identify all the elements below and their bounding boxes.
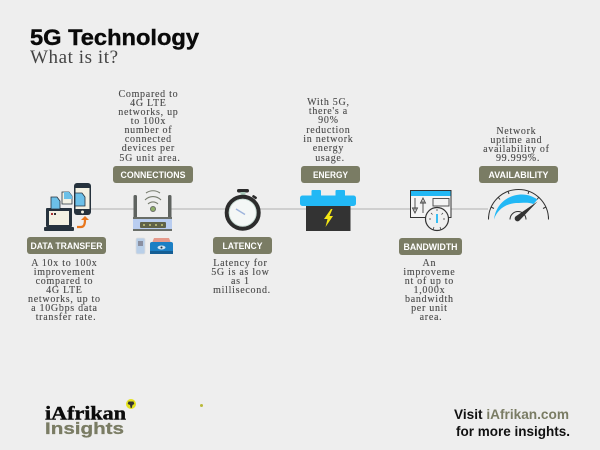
logo: iAfrikan Insights: iAfrikan	[45, 404, 126, 424]
title: 5G Technology	[30, 25, 200, 50]
panel: availability	[479, 126, 558, 221]
label pill: connections: CONNECTIONS	[120, 170, 186, 180]
text: energy: With 5G,	[307, 97, 350, 108]
text: energy: 90%	[318, 115, 339, 126]
icon: stopwatch	[227, 189, 259, 229]
text: data transfer: compared to	[36, 276, 93, 287]
text: availability: availability of	[483, 144, 550, 155]
label pill: bandwidth: BANDWIDTH	[404, 242, 458, 252]
label pill: connections	[113, 166, 193, 183]
label pill: data transfer: DATA TRANSFER	[30, 241, 103, 251]
text: data transfer: networks, up to	[28, 294, 101, 305]
panel: latency	[211, 189, 273, 296]
text: data transfer: transfer rate.	[36, 312, 96, 323]
panel: connections	[113, 89, 193, 254]
text: connections: 5G unit area.	[119, 153, 181, 164]
text: bandwidth: bandwidth	[405, 294, 454, 305]
subtitle: What is it?	[30, 47, 118, 68]
call to action: Visit iAfrikan.com	[454, 406, 569, 422]
panel: bandwidth	[399, 190, 462, 323]
text: energy: usage.	[315, 153, 345, 164]
text: connections: devices per	[122, 143, 175, 154]
text: energy: in network	[303, 134, 354, 145]
text: bandwidth: An	[423, 258, 436, 269]
icon: data transfer devices	[44, 183, 91, 231]
icon: wifi router	[133, 190, 172, 231]
logo: iAfrikan Insights	[45, 399, 136, 438]
label pill: latency: LATENCY	[222, 241, 262, 251]
text: connections: to 100x	[131, 116, 166, 127]
text: latency: millisecond.	[213, 285, 271, 296]
call to action	[454, 406, 570, 439]
icon: phone and car	[136, 238, 173, 254]
text: connections: networks, up	[118, 107, 179, 118]
decorative dot	[200, 404, 203, 407]
icon: africa badge	[126, 399, 136, 409]
icon: speedometer gauge	[488, 190, 548, 221]
call to action: for more insights.	[456, 423, 570, 439]
text: data transfer: A 10x to 100x	[31, 258, 98, 269]
icon: battery	[300, 190, 356, 231]
text: connections: Compared to	[118, 89, 178, 100]
label pill: energy: ENERGY	[313, 170, 348, 180]
text: energy: energy	[313, 143, 344, 154]
text: bandwidth: improveme	[403, 267, 455, 278]
text: latency: Latency for	[213, 258, 268, 269]
logo: iAfrikan Insights: Insights	[45, 419, 124, 438]
text: bandwidth: per unit	[411, 303, 448, 314]
text: connections: 4G LTE	[130, 98, 167, 109]
text: availability: 99.999%.	[496, 153, 540, 164]
panel: energy	[300, 97, 360, 231]
text: energy: there's a	[309, 106, 348, 117]
text: bandwidth: area.	[420, 312, 442, 323]
text: latency: 5G is as low	[211, 267, 270, 278]
text: bandwidth: 1,000x	[413, 285, 445, 296]
text: bandwidth: nt of up to	[405, 276, 454, 287]
text: data transfer: a 10Gbps data	[31, 303, 98, 314]
icon: bandwidth window and gauge	[410, 190, 451, 230]
label pill: availability: AVAILABILITY	[488, 170, 548, 180]
text: availability: Network	[496, 126, 536, 137]
panel: data transfer	[27, 183, 106, 323]
text: latency: as 1	[231, 276, 250, 287]
text: energy: reduction	[306, 125, 351, 136]
text: connections: number of	[124, 125, 172, 136]
text: connections: connected	[125, 134, 172, 145]
text: data transfer: improvement	[34, 267, 95, 278]
text: availability: uptime and	[490, 135, 542, 146]
text: data transfer: 4G LTE	[46, 285, 83, 296]
